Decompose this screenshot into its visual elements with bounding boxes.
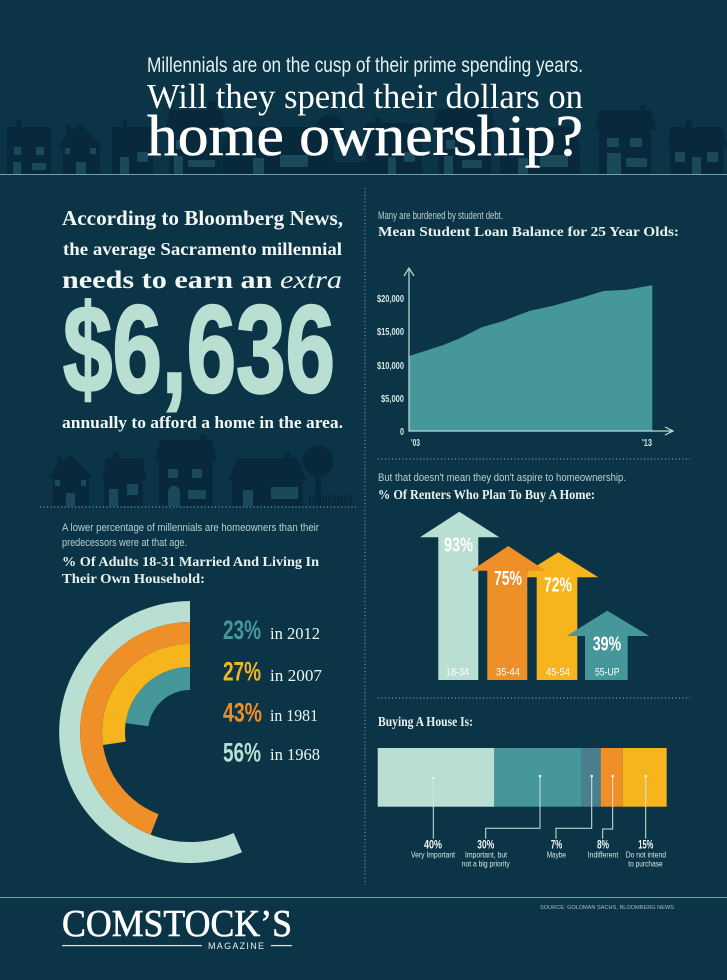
header house skyline	[7, 101, 727, 174]
illustration: row of houses	[48, 435, 352, 506]
intro copy second line: predecessors were at that age.	[62, 537, 187, 549]
label important not priority	[462, 837, 510, 869]
label do not intend: Do not intend	[626, 851, 666, 860]
label maybe: Maybe	[547, 851, 566, 860]
header house windows	[13, 138, 718, 174]
label do not intend	[626, 837, 666, 869]
y axis labels: $15,000	[377, 326, 404, 338]
intro copy: A lower percentage of millennials are homeowners than their	[62, 522, 319, 534]
label indifferent	[588, 837, 619, 860]
y axis labels: $20,000	[377, 293, 404, 305]
arrow 45-54: 45-54	[546, 667, 570, 679]
label indifferent: Indifferent	[588, 851, 619, 860]
arrow 18-34	[420, 512, 499, 680]
legend 1968: in 1968	[270, 745, 320, 764]
legend 2012: in 2012	[270, 624, 320, 643]
legend 2012: 23%	[223, 615, 261, 645]
logo: Comstock's Magazine: COMSTOCK’S	[62, 903, 292, 945]
label do not intend: 15%	[638, 837, 653, 851]
intro line two: the average Sacramento millennial	[63, 239, 342, 259]
legend 1981: 43%	[223, 698, 262, 728]
intro copy: But that doesn't mean they don't aspire to homeownership.	[378, 472, 626, 484]
intro line one: According to Bloomberg News,	[62, 206, 343, 230]
x axis labels	[411, 437, 652, 449]
arrow 35-44: 35-44	[496, 667, 520, 679]
bar labels	[411, 837, 666, 869]
legend 1968	[223, 738, 320, 768]
y axis labels: $10,000	[377, 360, 404, 372]
label important not priority: not a big priority	[462, 860, 510, 869]
x axis labels: '13	[642, 437, 652, 449]
source note: SOURCE: GOLDMAN SACHS, BLOOMBERG NEWS	[540, 905, 674, 911]
label do not intend: to purchase	[628, 860, 663, 869]
panel: renters heading	[378, 472, 626, 502]
arrow 18-34: 93%	[444, 535, 473, 557]
arrow 18-34: 18-34	[446, 667, 469, 679]
arrow chart: renters who plan to buy	[420, 512, 649, 680]
chart title second line: Their Own Household:	[62, 571, 205, 586]
panel: homeownership heading	[62, 522, 320, 586]
chart title: % Of Adults 18-31 Married And Living In	[62, 554, 320, 569]
arrow 35-44: 75%	[494, 568, 522, 590]
y axis labels	[377, 293, 404, 438]
arrow 35-44	[471, 546, 546, 680]
stacked bar: buying a house	[378, 748, 667, 807]
left dotted rule	[40, 506, 357, 508]
label indifferent: 8%	[597, 837, 609, 851]
question line: Will they spend their dollars on	[147, 77, 583, 116]
y axis labels: $5,000	[381, 393, 404, 405]
label important not priority: Important, but	[465, 851, 508, 860]
label maybe	[547, 837, 566, 860]
label very important: Very Important	[411, 851, 456, 860]
vertical dotted divider	[364, 188, 366, 885]
arrow 45-54: 72%	[544, 575, 572, 597]
arrow 55-up: 55-UP	[595, 667, 620, 679]
area chart: student loan balance	[377, 268, 673, 449]
arrow 45-54	[518, 552, 598, 680]
chart title: % Of Renters Who Plan To Buy A Home:	[378, 487, 595, 502]
label very important	[411, 837, 456, 860]
legend 2007: in 2007	[270, 666, 322, 685]
main headline: home ownership?	[147, 103, 583, 168]
radial chart: adults in own household	[59, 601, 242, 863]
footer rule	[0, 897, 727, 898]
intro copy: Many are burdened by student debt.	[378, 210, 503, 222]
panel: extra earnings needed	[62, 206, 343, 432]
heading: buying a house: Buying A House Is:	[378, 714, 473, 729]
arrow 55-up	[567, 611, 649, 680]
intro line: Millennials are on the cusp of their prime spending years.	[147, 54, 583, 77]
y axis labels: 0	[400, 426, 404, 438]
label important not priority: 30%	[477, 837, 495, 851]
x axis labels: '03	[411, 437, 420, 449]
logo: Comstock's Magazine: MAGAZINE	[208, 941, 264, 951]
label very important: 40%	[424, 837, 442, 851]
legend 2007	[223, 656, 322, 686]
chart axes	[404, 268, 673, 435]
legend 2007: 27%	[223, 656, 261, 686]
chart title: Mean Student Loan Balance for 25 Year Olds:	[378, 224, 679, 239]
legend 1981: in 1981	[270, 706, 318, 725]
legend 1968: 56%	[223, 738, 261, 768]
arrow 55-up: 39%	[593, 634, 621, 656]
header title block	[147, 54, 583, 168]
panel: student loan heading	[378, 210, 679, 239]
big dollar figure: $6,636	[63, 281, 335, 419]
legend 1981	[223, 698, 318, 728]
legend 2012	[223, 615, 320, 645]
bar leader lines	[432, 775, 647, 839]
intro line three: needs to earn an extra	[62, 267, 342, 294]
right dotted rules	[378, 459, 690, 698]
label maybe: 7%	[551, 837, 563, 851]
closing line: annually to afford a home in the area.	[62, 413, 343, 432]
radial chart legend	[223, 615, 322, 768]
header top rule	[0, 174, 727, 175]
